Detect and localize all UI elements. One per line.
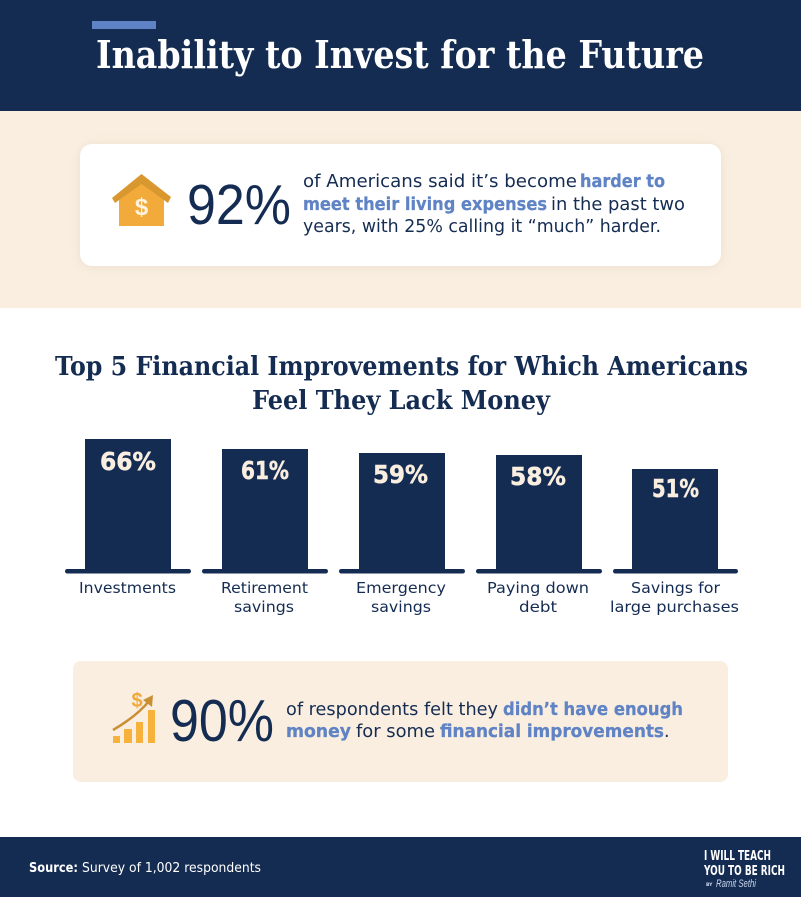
stat description: for some xyxy=(356,722,435,742)
bar: emergency savings 59% xyxy=(339,453,465,616)
stat description: of respondents felt they xyxy=(286,700,498,720)
source note: Survey of 1,002 respondents xyxy=(82,861,261,876)
title: Inability to Invest for the Future xyxy=(96,32,704,77)
stat description: financial improvements xyxy=(440,722,664,742)
icon: house with dollar xyxy=(112,174,171,226)
header banner xyxy=(0,0,801,111)
bar: savings for large purchases 51%: Savings for xyxy=(631,579,721,597)
bar chart xyxy=(65,439,739,616)
chart heading: Top 5 Financial Improvements for Which Americans xyxy=(55,352,748,382)
bar: paying down debt 58% xyxy=(476,455,602,616)
logo: Ramit Sethi xyxy=(716,878,756,890)
bar: savings for large purchases 51% xyxy=(610,469,739,616)
stat description: meet their living expenses xyxy=(303,194,547,215)
bar: emergency savings 59%: Emergency xyxy=(356,579,446,597)
bar: paying down debt 58%: debt xyxy=(519,598,557,616)
stat description: years, with 25% calling it “much” harder. xyxy=(303,216,661,237)
panel: 90% statistic xyxy=(73,661,728,782)
panel: 92% statistic xyxy=(0,111,801,308)
chart heading: Feel They Lack Money xyxy=(252,386,551,416)
stat description xyxy=(303,171,685,237)
bar: retirement savings 61% xyxy=(202,449,328,616)
bar: paying down debt 58%: 58% xyxy=(510,462,566,491)
bar: savings for large purchases 51%: 51% xyxy=(652,474,699,503)
stat description: in the past two xyxy=(551,194,685,215)
bar: savings for large purchases 51%: large purchases xyxy=(610,598,739,616)
footer xyxy=(0,837,801,897)
icon: rising bar chart with dollar: $ xyxy=(131,690,143,712)
stat description: harder to xyxy=(580,171,665,192)
bar: retirement savings 61%: savings xyxy=(234,598,294,616)
stat description: didn’t have enough xyxy=(503,700,683,720)
bar: emergency savings 59%: 59% xyxy=(373,460,428,489)
bar: investments 66% xyxy=(65,439,191,597)
stat: 90%: 90% xyxy=(170,688,274,754)
chart heading xyxy=(55,352,748,416)
stat description: . xyxy=(664,722,670,742)
logo: BY xyxy=(706,882,713,888)
stat description xyxy=(286,700,683,742)
bar: paying down debt 58%: Paying down xyxy=(487,579,589,597)
stat: 92%: 92% xyxy=(187,173,291,237)
stat description: of Americans said it’s become xyxy=(303,171,577,192)
bar: investments 66%: 66% xyxy=(100,447,156,476)
bar: emergency savings 59%: savings xyxy=(371,598,431,616)
bar: investments 66%: Investments xyxy=(79,579,176,597)
icon: house with dollar: $ xyxy=(135,194,149,221)
stat description: money xyxy=(286,722,352,742)
icon: rising bar chart with dollar xyxy=(113,690,155,743)
bar: retirement savings 61%: Retirement xyxy=(221,579,308,597)
source note: Source: xyxy=(29,861,78,876)
bar: retirement savings 61%: 61% xyxy=(241,456,289,485)
logo xyxy=(703,848,785,890)
